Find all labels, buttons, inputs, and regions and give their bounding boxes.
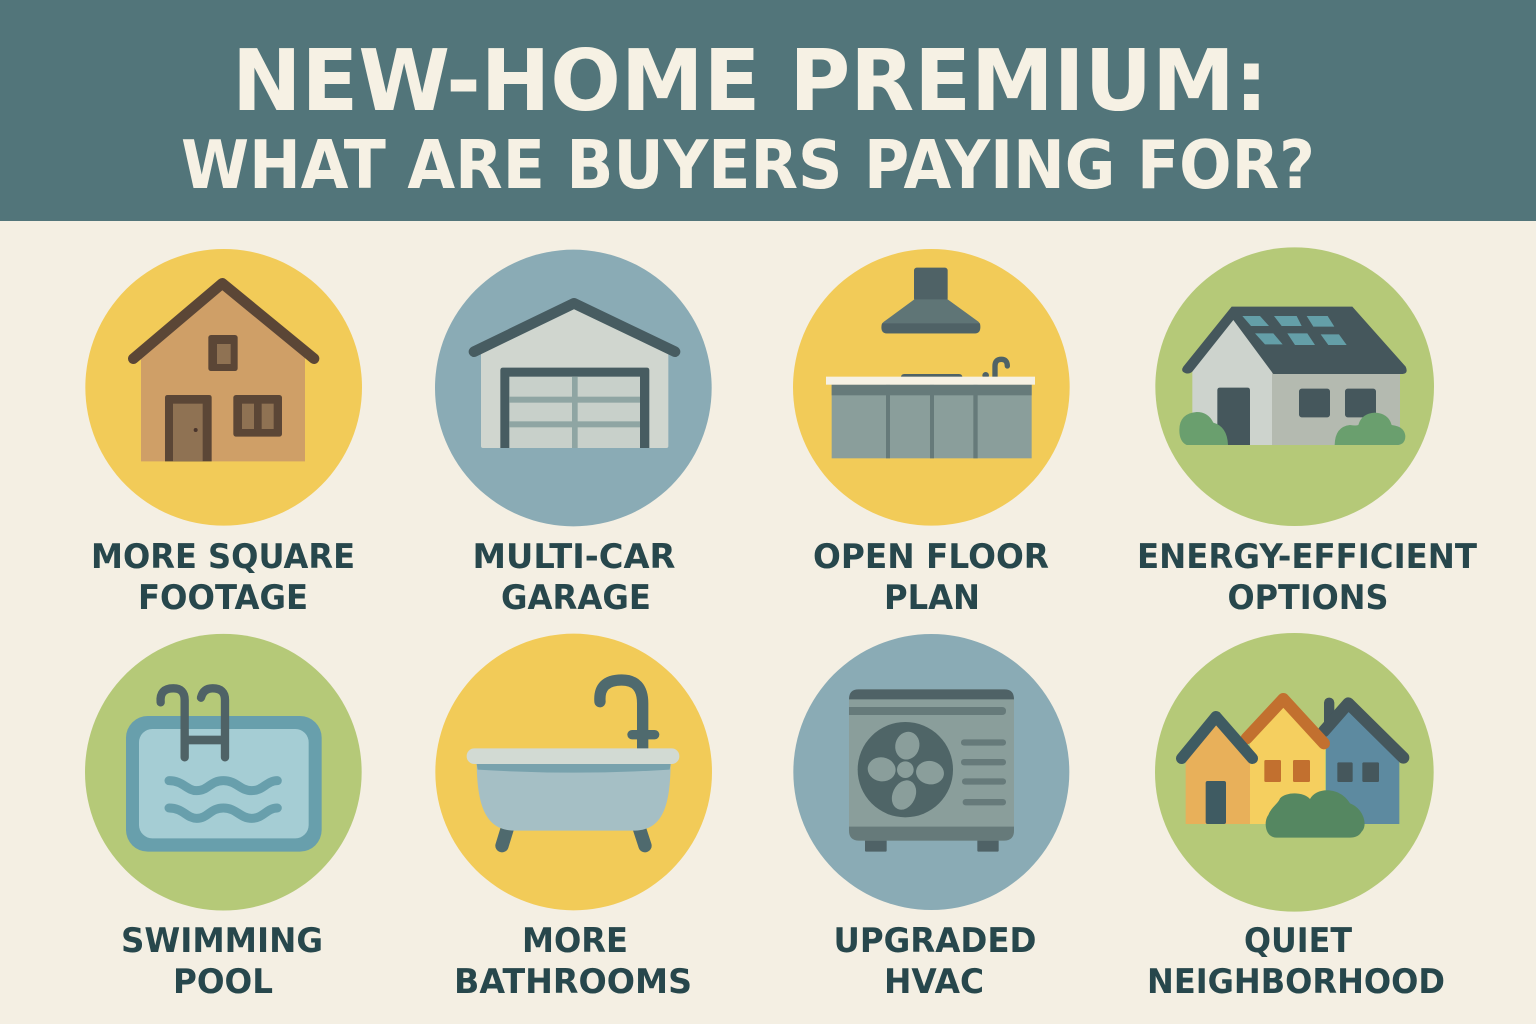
label: GARAGE xyxy=(501,578,651,617)
label: POOL xyxy=(173,962,273,1001)
item: energy-efficient options xyxy=(1137,247,1477,617)
label: UPGRADED xyxy=(834,921,1036,960)
label: FOOTAGE xyxy=(138,578,308,617)
label xyxy=(834,921,1036,1001)
item: multi-car garage xyxy=(435,250,712,617)
icon: hvac unit xyxy=(793,634,1069,910)
icon: kitchen xyxy=(793,249,1070,526)
item: open floor plan xyxy=(793,249,1070,617)
item: swimming pool xyxy=(85,634,362,1001)
item: upgraded hvac xyxy=(793,634,1069,1001)
label xyxy=(1147,921,1445,1001)
label: ENERGY-EFFICIENT xyxy=(1137,537,1477,576)
label xyxy=(472,537,676,617)
label: BATHROOMS xyxy=(454,962,692,1001)
subtitle: WHAT ARE BUYERS PAYING FOR? xyxy=(181,126,1315,204)
label: HVAC xyxy=(884,962,984,1001)
label: SWIMMING xyxy=(121,921,323,960)
label: NEIGHBORHOOD xyxy=(1147,962,1445,1001)
label xyxy=(121,921,323,1001)
icon: pool xyxy=(85,634,362,910)
label xyxy=(813,537,1049,617)
label: PLAN xyxy=(884,578,980,617)
label xyxy=(454,921,692,1001)
icon: house xyxy=(85,249,362,526)
icon: solar house xyxy=(1155,247,1434,526)
label: OPTIONS xyxy=(1228,578,1388,617)
title banner xyxy=(0,0,1536,221)
icon: bathtub xyxy=(435,634,712,910)
item: quiet neighborhood xyxy=(1147,633,1445,1001)
label: QUIET xyxy=(1244,921,1352,960)
label: OPEN FLOOR xyxy=(813,537,1049,576)
label: MORE SQUARE xyxy=(91,537,355,576)
icon: garage xyxy=(435,250,712,526)
item: more bathrooms xyxy=(435,634,712,1001)
item: more square footage xyxy=(85,249,362,617)
icon: houses xyxy=(1155,633,1434,912)
label: MULTI-CAR xyxy=(472,537,676,576)
main title: NEW-HOME PREMIUM: xyxy=(232,32,1268,131)
label: MORE xyxy=(522,921,628,960)
label xyxy=(91,537,355,617)
label xyxy=(1137,537,1477,617)
